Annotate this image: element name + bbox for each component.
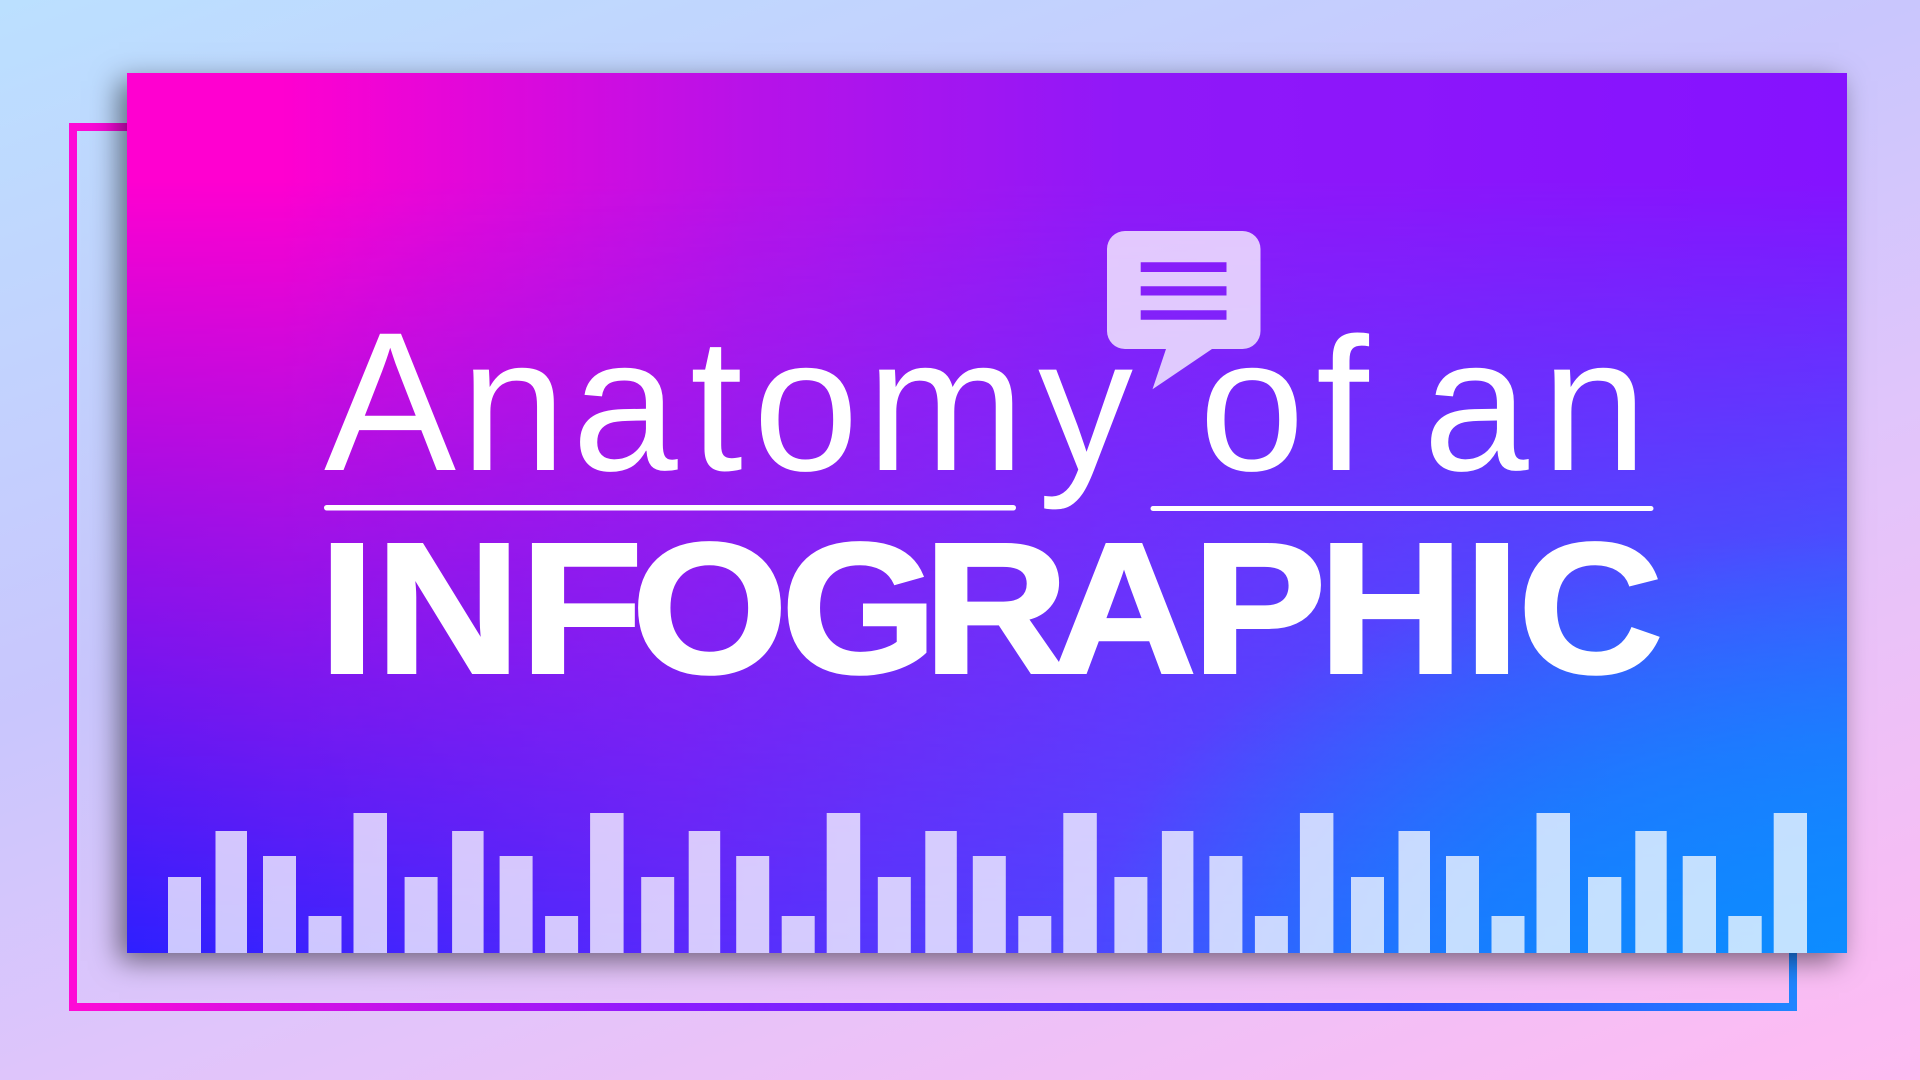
title line: INFOGRAPHIC: INFOGRAPHIC: [319, 505, 1663, 713]
divider underline right: [1150, 506, 1654, 511]
panel drop shadow: [127, 73, 1847, 953]
icon: speech bubble with text lines: [1107, 231, 1260, 389]
title line: Anatomy of an: natomy of an: [460, 299, 1647, 511]
panel: main gradient card: [127, 73, 1847, 953]
title line: Anatomy of an: A: [324, 291, 456, 512]
divider underline left: [324, 505, 1016, 510]
bar chart decoration: [168, 813, 1807, 953]
